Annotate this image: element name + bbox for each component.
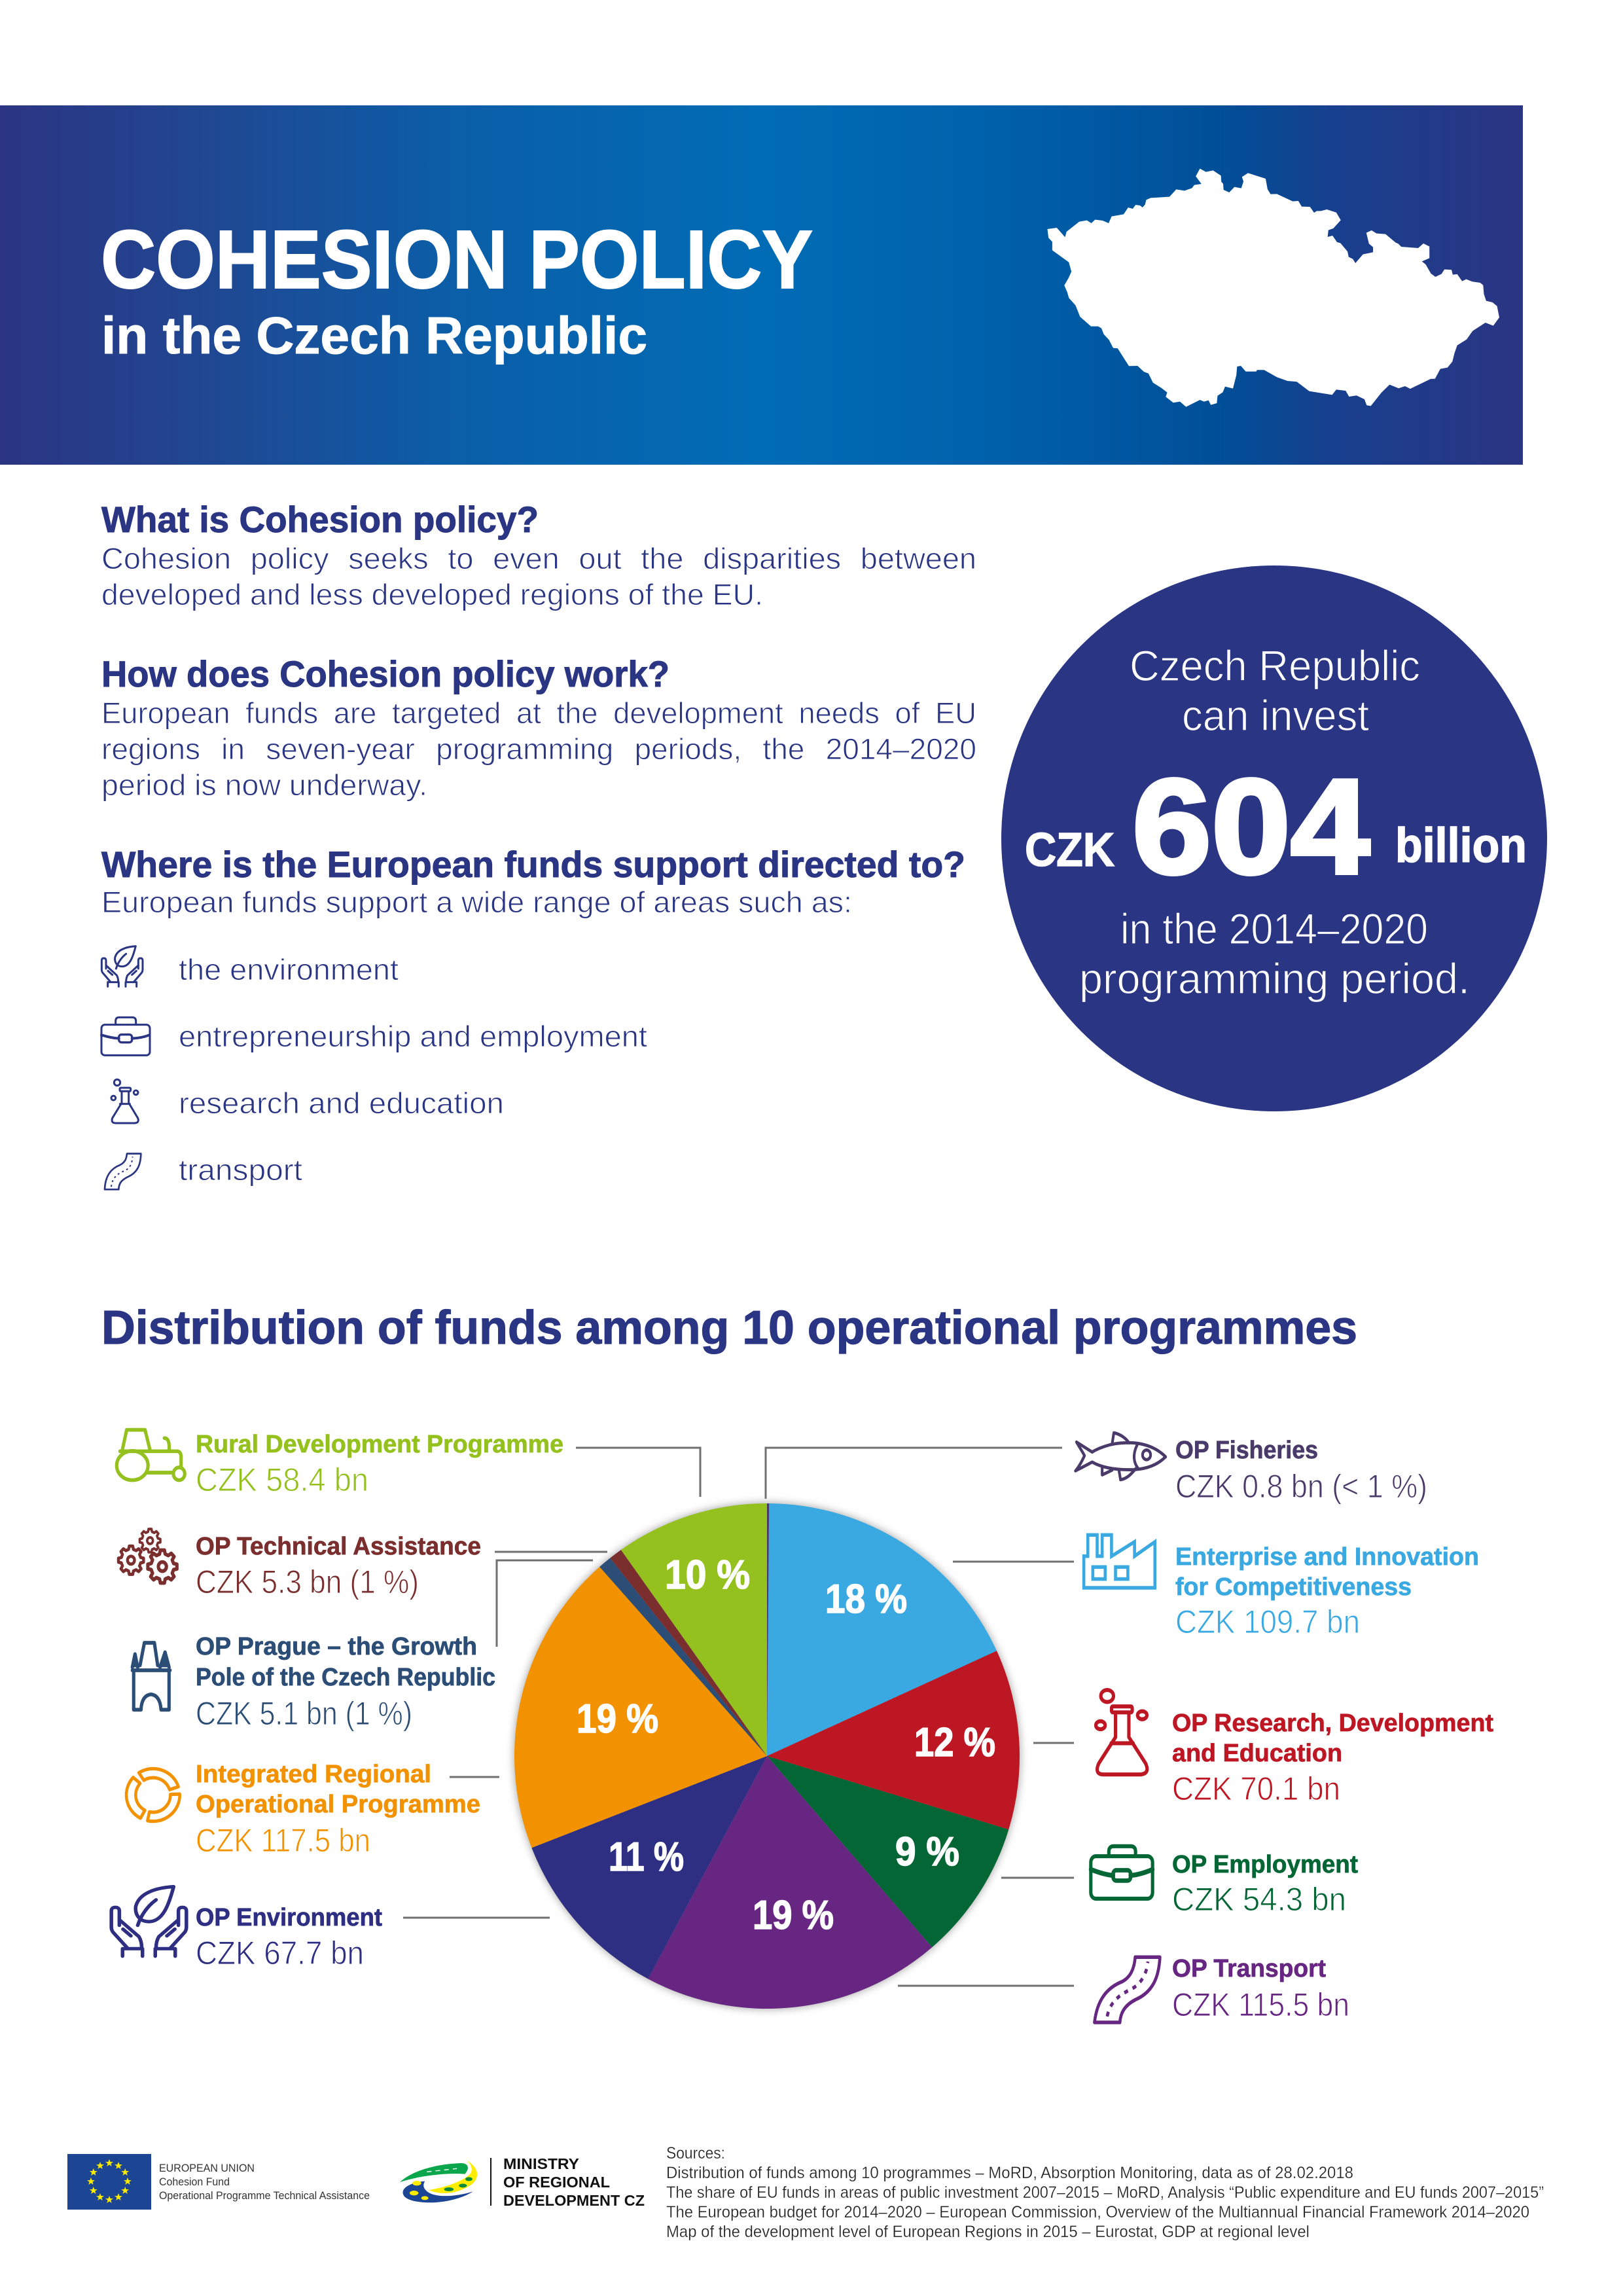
icon: briefcase bbox=[1091, 1846, 1152, 1899]
EU logo text: Operational Programme Technical Assistance bbox=[159, 2189, 370, 2202]
callout amount bbox=[1025, 751, 1527, 902]
callout amount: billion bbox=[1395, 818, 1527, 872]
EU flag bbox=[67, 2154, 151, 2210]
text: what is cohesion policy: developed and less developed regions of the EU. bbox=[101, 578, 763, 611]
sources: Sources: bbox=[666, 2144, 725, 2162]
legend: research and education bbox=[1096, 1690, 1493, 1807]
legend: environment: OP Environment bbox=[196, 1904, 382, 1931]
percentage labels: 12 % bbox=[914, 1720, 995, 1765]
map of the Czech Republic bbox=[1047, 169, 1499, 407]
percentage labels bbox=[577, 1552, 995, 1938]
slice: technical assistance 1% bbox=[610, 1550, 767, 1756]
icon: road bbox=[1094, 1957, 1160, 2022]
percentage labels: 19 % bbox=[577, 1696, 658, 1742]
legend: integrated regional: CZK 117.5 bn bbox=[196, 1822, 370, 1859]
title: in the Czech Republic bbox=[101, 306, 647, 365]
item: entrepreneurship and employment: entrepreneurship and employment bbox=[179, 1020, 648, 1053]
legend: employment: CZK 54.3 bn bbox=[1172, 1881, 1346, 1918]
ministry text bbox=[503, 2155, 645, 2209]
legend: prague: Pole of the Czech Republic bbox=[196, 1664, 495, 1691]
icon: factory bbox=[1084, 1535, 1155, 1588]
title bbox=[101, 213, 813, 365]
heading: how does it work: How does Cohesion policy work? bbox=[101, 653, 669, 694]
slice: integrated regional 19% bbox=[514, 1567, 767, 1848]
legend: transport: CZK 115.5 bn bbox=[1172, 1986, 1349, 2023]
icon: flask bbox=[1096, 1690, 1147, 1774]
legend: technical assistance: CZK 5.3 bn (1 %) bbox=[196, 1564, 419, 1600]
sources: Map of the development level of European Regions in 2015 – Eurostat, GDP at regional level bbox=[666, 2223, 1310, 2241]
legend: fisheries: CZK 0.8 bn (< 1 %) bbox=[1175, 1468, 1427, 1505]
percentage labels: 11 % bbox=[609, 1835, 684, 1880]
legend: technical assistance bbox=[118, 1529, 481, 1600]
text: what is cohesion policy bbox=[101, 542, 976, 611]
text: what is cohesion policy: Cohesion policy seeks to even out the disparities between bbox=[101, 542, 976, 575]
callout closing text bbox=[1079, 905, 1470, 1003]
legend: employment: OP Employment bbox=[1172, 1851, 1358, 1878]
sources: The share of EU funds in areas of public investment 2007–2015 – MoRD, Analysis “Public expenditure and EU funds 2007–2015” bbox=[666, 2183, 1544, 2202]
legend: rural development bbox=[116, 1430, 563, 1498]
legend: enterprise and innovation: for Competitiveness bbox=[1175, 1573, 1412, 1601]
legend: research and education: and Education bbox=[1172, 1740, 1342, 1767]
icon: ring segments bbox=[126, 1768, 180, 1821]
legend: prague: CZK 5.1 bn (1 %) bbox=[196, 1695, 412, 1732]
icon: gears bbox=[118, 1529, 177, 1583]
legend: integrated regional: Operational Programme bbox=[196, 1791, 480, 1818]
icon: tractor bbox=[116, 1430, 185, 1480]
slice: employment 9% bbox=[767, 1756, 1008, 1947]
title: COHESION POLICY bbox=[101, 213, 813, 306]
percentage labels: 10 % bbox=[665, 1552, 750, 1598]
slice: transport 19% bbox=[648, 1756, 932, 2009]
text: how does it work: European funds are targeted at the development needs of EU bbox=[101, 696, 976, 730]
slice: fisheries bbox=[767, 1503, 769, 1756]
ministry text: OF REGIONAL bbox=[503, 2174, 610, 2191]
icon: flask bbox=[111, 1079, 138, 1123]
icon: hands and leaf bbox=[111, 1887, 187, 1956]
slice: prague 1% bbox=[599, 1558, 767, 1756]
EU logo text: EUROPEAN UNION bbox=[159, 2162, 255, 2174]
slice: enterprise 18% bbox=[767, 1503, 997, 1756]
slice: environment 11% bbox=[531, 1756, 767, 1979]
callout circle: CZK 604 billion bbox=[1001, 565, 1547, 1111]
slice: rural development 10% bbox=[621, 1503, 767, 1756]
legend: transport bbox=[1094, 1955, 1349, 2023]
legend: transport: OP Transport bbox=[1172, 1955, 1326, 1982]
sources: The European budget for 2014–2020 – European Commission, Overview of the Multiannual Financial Framework 2014–2020 bbox=[666, 2203, 1529, 2221]
ministry text: DEVELOPMENT CZ bbox=[503, 2192, 645, 2209]
list of supported areas bbox=[101, 946, 648, 1189]
icon: briefcase bbox=[101, 1017, 150, 1055]
item: research and education: research and education bbox=[179, 1086, 504, 1120]
item: the environment: the environment bbox=[179, 953, 399, 986]
item: transport: transport bbox=[179, 1153, 303, 1187]
percentage labels: 9 % bbox=[895, 1829, 959, 1874]
slice: research 12% bbox=[767, 1651, 1020, 1829]
text: how does it work: regions in seven-year programming periods, the 2014–2020 bbox=[101, 732, 976, 766]
legend: prague: OP Prague – the Growth bbox=[196, 1633, 477, 1660]
icon: road bbox=[105, 1154, 141, 1189]
legend: environment: CZK 67.7 bn bbox=[196, 1935, 364, 1971]
sources: Distribution of funds among 10 programmes – MoRD, Absorption Monitoring, data as of 28.02.2018 bbox=[666, 2164, 1353, 2182]
text: areas intro: European funds support a wide range of areas such as: bbox=[101, 886, 852, 919]
section heading: Distribution of funds among 10 operational programmes bbox=[101, 1302, 1357, 1354]
EU logo text: Cohesion Fund bbox=[159, 2176, 230, 2188]
callout closing text: in the 2014–2020 bbox=[1120, 905, 1428, 953]
legend: enterprise and innovation: CZK 109.7 bn bbox=[1175, 1604, 1360, 1640]
logo: European Union bbox=[67, 2154, 370, 2210]
callout amount: CZK bbox=[1025, 824, 1115, 876]
icon: bridge tower bbox=[132, 1643, 170, 1710]
percentage labels: 18 % bbox=[825, 1577, 907, 1622]
text: how does it work: period is now underway. bbox=[101, 768, 427, 802]
callout lead text: Czech Republic bbox=[1130, 641, 1420, 690]
legend: fisheries bbox=[1075, 1433, 1427, 1505]
pie chart bbox=[514, 1503, 1020, 2009]
heading: what is cohesion policy: What is Cohesion policy? bbox=[101, 499, 539, 540]
header banner bbox=[0, 105, 1523, 465]
EU logo text bbox=[159, 2162, 370, 2202]
legend: employment bbox=[1091, 1846, 1358, 1918]
icon: fish bbox=[1075, 1433, 1166, 1480]
legend: integrated regional bbox=[126, 1761, 480, 1859]
callout lead text bbox=[1130, 641, 1420, 740]
callout lead text: can invest bbox=[1182, 691, 1369, 740]
ministry text: MINISTRY bbox=[503, 2155, 579, 2172]
legend: rural development: Rural Development Programme bbox=[196, 1431, 563, 1458]
legend: research and education: CZK 70.1 bn bbox=[1172, 1770, 1340, 1807]
ministry emblem bbox=[400, 2161, 477, 2202]
legend: environment bbox=[111, 1887, 382, 1971]
intro text blocks bbox=[101, 499, 976, 919]
legend: fisheries: OP Fisheries bbox=[1175, 1437, 1318, 1464]
legend: enterprise and innovation: Enterprise and Innovation bbox=[1175, 1543, 1479, 1571]
legend: integrated regional: Integrated Regional bbox=[196, 1761, 431, 1788]
legend: prague bbox=[132, 1633, 495, 1732]
logo: Ministry of Regional Development bbox=[400, 2155, 645, 2209]
icon: hands and leaf bbox=[101, 946, 143, 986]
text: how does it work bbox=[101, 696, 976, 802]
legend: enterprise and innovation bbox=[1084, 1535, 1479, 1640]
legend: technical assistance: OP Technical Assistance bbox=[196, 1533, 481, 1560]
legend: research and education: OP Research, Development bbox=[1172, 1710, 1493, 1737]
percentage labels: 19 % bbox=[753, 1893, 834, 1938]
callout amount: 604 bbox=[1132, 751, 1370, 902]
legend: rural development: CZK 58.4 bn bbox=[196, 1462, 368, 1498]
sources bbox=[666, 2144, 1544, 2241]
heading: where is the support directed: Where is the European funds support directed to? bbox=[101, 844, 965, 885]
leader lines bbox=[403, 1448, 1074, 1986]
callout closing text: programming period. bbox=[1079, 954, 1470, 1003]
